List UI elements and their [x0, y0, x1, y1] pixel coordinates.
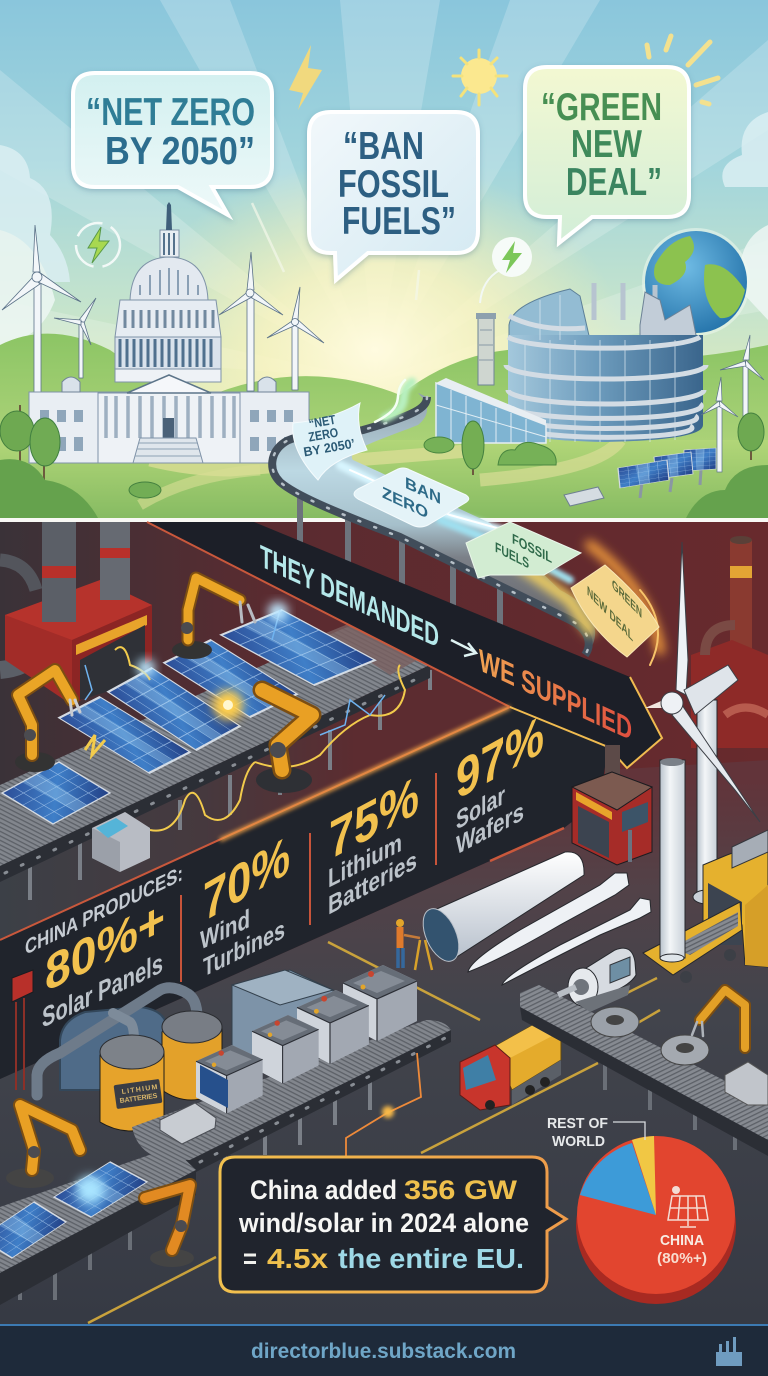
speech bubble: Green New Deal: [525, 67, 689, 243]
wind turbines left: [2, 225, 324, 395]
banner: Ban Zero: BAN: [405, 473, 441, 508]
robot arm 1: [15, 670, 80, 772]
solar panel array: [618, 448, 716, 498]
stat: 70% wind turbines: Turbines: [203, 913, 285, 983]
callout text line 3: 4.5x: [267, 1243, 328, 1274]
clouds: [0, 112, 768, 345]
rolled document: [564, 487, 604, 506]
quote line 2: BY 2050”: [105, 130, 255, 173]
icon: energy bubble: [480, 237, 532, 303]
chemical tanks: [100, 1011, 222, 1131]
panel: demand scene (top half): [0, 0, 768, 540]
electric motor: [558, 948, 636, 1012]
factory top-left: [0, 522, 152, 705]
red alarm post: [12, 970, 33, 1090]
stat: 75% lithium batteries: [328, 764, 419, 921]
glow streams orange: [590, 545, 660, 665]
long curved belt carrying slogans: [272, 380, 595, 655]
stat: 70% wind turbines: 70%: [203, 824, 290, 934]
orange wire to callout: [346, 1053, 421, 1158]
pie chart: [576, 1136, 736, 1304]
red machine by ribbon: [572, 745, 652, 865]
quote line 1: “GREEN: [541, 86, 662, 129]
stat: 70% wind turbines: Wind: [200, 903, 250, 956]
bushes foreground: [0, 459, 768, 518]
slogan banners on belt: [293, 403, 660, 665]
chemical tanks: BATTERIES: [119, 1093, 158, 1105]
banner: Net Zero: BY 2050’: [302, 436, 356, 459]
callout: 356 GW: [220, 1157, 566, 1292]
banner: Net Zero: [293, 403, 367, 480]
icon: solar panel: [668, 1186, 708, 1227]
callout text line 2: wind/solar in 2024 alone: [238, 1208, 529, 1238]
hills and ground: [0, 334, 768, 519]
icon: factory logo: [716, 1337, 742, 1366]
solar panels on belt: [2, 610, 375, 824]
sun rays: [0, 0, 768, 380]
grey machine behind batteries: [232, 970, 333, 1075]
footer: [0, 1324, 768, 1376]
quote line 2: FOSSIL: [338, 163, 449, 206]
wind turbine: [645, 542, 760, 904]
stat: 97% solar wafers: Wafers: [456, 795, 524, 861]
label: rest of world: [547, 1115, 645, 1150]
truck: [460, 1020, 561, 1110]
stat: 75% lithium batteries: 75%: [329, 764, 419, 872]
stat: 97% solar wafers: 97%: [456, 704, 544, 812]
banner: Fossil Fuels: FUELS: [495, 540, 529, 572]
stat: 97% solar wafers: Solar: [456, 780, 505, 836]
icon: sun: [453, 50, 507, 105]
stat: 80% solar panels: Solar Panels: [42, 947, 163, 1035]
callout text line 1: 356 GW: [404, 1175, 518, 1205]
text: we supplied: WE SUPPLIED: [479, 641, 632, 747]
belt rim: [272, 397, 589, 655]
chimney and EU parliament building: [436, 283, 706, 443]
conveyor: right: [520, 985, 768, 1156]
chemical tanks: LITHIUM: [121, 1084, 158, 1096]
belt surface: [272, 393, 595, 655]
white divider: [0, 518, 768, 522]
icon: circular energy arrows: [76, 223, 120, 267]
quote line 3: DEAL”: [566, 161, 662, 204]
right factory: [691, 536, 768, 748]
asphalt floor: [0, 760, 768, 1325]
panel: supply scene (bottom half): [0, 380, 768, 1325]
robot arm 3: [256, 690, 312, 793]
banner: Green New Deal: GREEN: [612, 576, 642, 622]
tower section on gantry platform: [660, 758, 685, 962]
electric arcs: [85, 647, 405, 831]
robot arm 2: [172, 578, 255, 659]
banner: Ban Zero: [354, 468, 469, 527]
quote line 1: “BAN: [343, 125, 424, 168]
robot arm 6: [692, 990, 745, 1048]
label: China: CHINA: [660, 1232, 704, 1249]
conveyor: solar panels: [0, 622, 430, 900]
text: they demanded: THEY DEMANDED: [260, 538, 439, 655]
capitol building: [29, 202, 309, 463]
metal rings and stack: [591, 1007, 768, 1105]
conveyor: batteries: [132, 1020, 451, 1175]
banner: Net Zero: “NET: [308, 412, 337, 431]
pipes and tanks: [37, 988, 197, 1095]
callout text line 3: [243, 1243, 524, 1274]
pie slice: other blue: [580, 1143, 656, 1215]
quote line 2: NEW: [571, 123, 642, 166]
label: 80%+: (80%+): [657, 1250, 707, 1267]
arrow glyph: [451, 640, 476, 656]
banner: Net Zero: ZERO: [307, 425, 339, 445]
energy streams: [340, 380, 590, 630]
speech bubble: Net Zero: [73, 73, 272, 215]
batteries: [160, 965, 417, 1144]
label: rest of world: WORLD: [552, 1133, 605, 1150]
banner: Fossil Fuels: [466, 522, 581, 578]
banner: Green New Deal: NEW DEAL: [587, 583, 633, 645]
stat: 75% lithium batteries: Lithium: [328, 827, 402, 894]
stat: 80% solar panels: 80%+: [45, 889, 165, 1003]
stat: China Produces heading: CHINA PRODUCES:: [25, 861, 183, 960]
callout text line 1: China added: [250, 1175, 397, 1205]
quote line 1: “NET ZERO: [86, 91, 255, 134]
right wind turbines: [701, 335, 764, 472]
stat: 75% lithium batteries: Batteries: [328, 844, 417, 921]
floor between conveyor and band: [0, 650, 510, 945]
speech bubble: Ban Fossil Fuels: [309, 112, 478, 280]
arrow ribbon: they demanded, we supplied: [0, 522, 662, 940]
callout text line 3: =: [243, 1243, 257, 1274]
light streaks: [252, 203, 419, 300]
banner: Fossil Fuels: FOSSIL: [512, 532, 552, 567]
footer url: directorblue.substack.com: [251, 1340, 516, 1363]
icon: shine lines: [647, 36, 718, 104]
globe: [642, 228, 750, 336]
callout text line 3: the entire EU.: [338, 1243, 524, 1274]
stat dividers: [181, 773, 436, 982]
stats band and ribbon arrow base: [0, 707, 608, 1079]
floor lane markings: [88, 942, 660, 1323]
turbine tower section and blades: [416, 852, 651, 985]
banner: Green New Deal: [571, 565, 659, 657]
stat: 97% solar wafers: [456, 704, 544, 861]
pie slice: rest of world yellow: [632, 1136, 656, 1215]
worker: [396, 919, 432, 970]
label: rest of world: REST OF: [547, 1115, 608, 1132]
trees and bushes right: [424, 413, 764, 475]
robot arm 4: [6, 1105, 80, 1188]
trees left: [0, 405, 161, 498]
robot arm 5: [145, 1185, 194, 1267]
stat: 70% wind turbines: [200, 824, 290, 983]
conveyor: bottom-left panels: [0, 1147, 196, 1305]
callout text line 1: [250, 1175, 518, 1205]
banner: Ban Zero: ZERO: [382, 483, 428, 523]
icon: lightning bolt: [289, 45, 322, 110]
control panel: [92, 812, 150, 872]
belt legs: [300, 495, 500, 630]
yellow inspection gantry: [643, 830, 768, 983]
quote line 3: FUELS”: [342, 200, 456, 243]
